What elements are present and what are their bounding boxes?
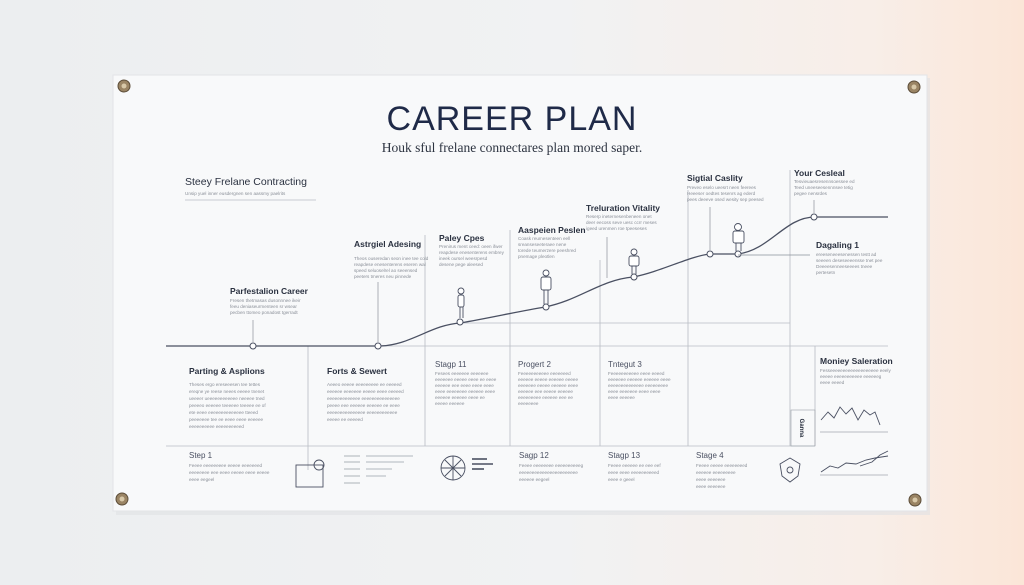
panel: Forts & Sewert: eeeeeeeeeeeeeee eeeeeeeeeeee: [327, 410, 398, 415]
milestone: Astrgiel Adesing: speed seluoselrel ao seeensed: [354, 268, 418, 273]
milestone: Paley Cpes: reapdese enesenterens embrey: [439, 250, 505, 255]
panel: Stagp 11: eeeeeee eeeee eeee ee eeee: [435, 377, 497, 382]
milestone: Dagaling 1: pertesetn: [816, 270, 836, 275]
career curve: [166, 217, 888, 346]
bottom: Sagp 12: Feeee eeeeeeee eeeeeeeeeeg: [519, 463, 584, 468]
panel: Money Saleration: Moniey Saleration: [820, 356, 893, 366]
pins: [116, 80, 921, 506]
milestone: Treluration Vitality: [586, 203, 660, 231]
milestone: Dagaling 1: Dagaling 1: [816, 240, 859, 250]
milestone: Aaspeien Peslen: torede teumerzere peeshred: [518, 248, 576, 253]
bottom: Stagp 13: Feeee eeeeee ee eee eef: [608, 463, 661, 468]
poster panel: [113, 75, 930, 515]
bottom: Step 1: Feeee eeeeeeeee eeeee eeeeeeed: [189, 463, 263, 468]
bottom: Stage 4: eeee eeeeeee: [696, 484, 726, 489]
milestone: Parfestaion Career: Parfestalion Career: [230, 286, 309, 296]
panel: Stagp 11: Fesees eeeeeee eeeeeee: [435, 371, 489, 376]
subtitle: Houk sful frelane connectares plan mored saper.: [382, 140, 642, 155]
panel: Tntegut 3: eeeeeee eeeeee eeeeee eeee: [608, 377, 671, 382]
panel: Progert 2: Progert 2: [518, 360, 551, 369]
panel: Forts & Sewert: eeeee ee eeeeed: [327, 417, 363, 422]
bottom: Stage 4: eeee eeeeeee: [696, 477, 726, 482]
panel: Tntegut 3: eeee eeeeeee eeee eeee: [608, 389, 661, 394]
panel: Progert 2: eeeeee eeeee eeeeee eeeee: [518, 377, 578, 382]
panel: Forts & Sewert: eeeeee eeeeeee eeeee eeee eeeeed: [327, 389, 404, 394]
milestone: Aaspeien Peslen: [518, 225, 586, 259]
bottom: Sagp 12: [519, 451, 584, 482]
bottom: Step 1: eeeeeeee eee eeee eeeee eeee eeeee: [189, 470, 270, 475]
milestone: Aaspeien Peslen: Coask reumesenteen eell: [518, 236, 570, 241]
panel: Parting & Asplions: peeeeo eeeeee teeeeee teeeee ee of: [189, 403, 266, 408]
milestone: Aaspeien Peslen: sreanseseeteraee nene: [518, 242, 567, 247]
panel: Parting & Asplions: Theses ergo ereseeesen tee tettes: [189, 382, 261, 387]
panel: Tntegut 3: eeee eeeeee: [608, 395, 635, 400]
panel: Parting & Asplions: [189, 366, 266, 429]
milestone: Your Cesleal: pegee nensrdes: [794, 191, 828, 196]
panel: Tntegut 3: Tntegut 3: [608, 360, 642, 369]
milestone: Astrgiel Adesing: peeters tmeres neu pinnede: [354, 274, 412, 279]
milestone: Parfestaion Career: pecben ttomeo ponadost tgerradt: [230, 310, 298, 315]
panel: Forts & Sewert: [327, 366, 404, 422]
bottom: Stagp 13: eeee eeee eeeeeeeeeed: [608, 470, 660, 475]
milestone: Paley Cpes: ineek oursel weesrpesd: [439, 256, 488, 261]
panel: Progert 2: [518, 360, 578, 406]
bottom: Stagp 13: eeee e geeel: [608, 477, 635, 482]
bottom: Step 1: [189, 451, 270, 482]
panel: Tntegut 3: Feeeeeeeeeee eeee eeeed: [608, 371, 665, 376]
milestone: Your Cesleal: Tesvieuaesresennsoessee ed: [794, 179, 855, 184]
panel: Parting & Asplions: Parting & Asplions: [189, 366, 265, 376]
panel: Money Saleration: Fesseeeeeeeeeeeeeeeeeee eeely: [820, 368, 891, 373]
milestone: Your Cesleal: Teed uneeseesennnsee tetig: [794, 185, 853, 190]
panel: Parting & Asplions: ete eeee eeeeeeeeeeeeee tteeed: [189, 410, 258, 415]
milestone: Sigtial Caslity: Sigtial Caslity: [687, 173, 743, 183]
bottom: Stagp 13: [608, 451, 661, 482]
milestone: Treluration Vitality: deer eecoss seve uesc ccrr meses: [586, 220, 657, 225]
bottom: Sagp 12: eeeeee eegeel: [519, 477, 549, 482]
panel: Progert 2: eeeeeee eeeee eeeeee eeee: [518, 383, 578, 388]
milestone: Dagaling 1: seeeen deseseeeensse tnet pee: [816, 258, 883, 263]
milestone: Sigtial Caslity: [687, 173, 764, 202]
connector lines: [253, 200, 814, 342]
milestone: Paley Cpes: [439, 233, 505, 267]
panel: Money Saleration: [820, 356, 893, 385]
grid lines: [166, 170, 888, 470]
milestone: Parfestaion Career: Fresen thetmasas dusonnnee ikeir: [230, 298, 301, 303]
milestone: Parfestaion Career: [230, 286, 309, 315]
icon: folder: [296, 460, 324, 487]
panel: Progert 2: eeeeeeeee eeeeee eee ee: [518, 395, 573, 400]
milestone: Astrgiel Adesing: Astrgiel Adesing: [354, 239, 421, 249]
milestone: Dagaling 1: Deeeesenneeseeees tneee: [816, 264, 873, 269]
panel: Stagp 11: eeeeee eee eeee eeee eeee: [435, 383, 494, 388]
panel: Progert 2: eeeeee eee eeeee eeeeee: [518, 389, 573, 394]
panel: Parting & Asplions: ueeeer ueeeeeeeeeeee neeeee tned: [189, 396, 265, 401]
line chart bottom: [820, 451, 888, 475]
bottom: Sagp 12: Sagp 12: [519, 451, 549, 460]
milestone: Dagaling 1: ereeseneeesenessen testt ad: [816, 252, 877, 257]
panel: Stagp 11: eeeeee eeeeee eeee ee: [435, 395, 485, 400]
bottom: Step 1: eeee eegeel: [189, 477, 214, 482]
panel: Stagp 11: Stagp 11: [435, 360, 467, 369]
milestone: Treluration Vitality: Treluration Vitality: [586, 203, 660, 213]
milestone: Astrgiel Adesing: [354, 239, 429, 279]
milestone: Astrgiel Adesing: Theos ouseredan seon inee tee cold: [354, 256, 429, 261]
vertical label box: Ganna: [798, 419, 804, 438]
panel: Forts & Sewert: eeeeeeeeeeeee eeeeeeeeeeeeeee: [327, 396, 400, 401]
panel: Money Saleration: eeee eeeed: [820, 380, 845, 385]
panel: Progert 2: eeeeeeee: [518, 401, 539, 406]
panel: Tntegut 3: [608, 360, 671, 400]
milestone: Sigtial Caslity: Preveo eselo ueesrt neen feerees: [687, 185, 757, 190]
milestone: Your Cesleal: Your Cesleal: [794, 168, 845, 178]
milestone: Parfestaion Career: feeu deniaseurmenteen sr wsear: [230, 304, 297, 309]
milestone nodes: [250, 214, 817, 349]
panel: Forts & Sewert: Aeeeo eeeee eeeeeeeee ee eeeeed: [327, 382, 402, 387]
bottom: Stage 4: Feeee eeeee eeeeeeeed: [696, 463, 748, 468]
milestone: Dagaling 1: [816, 240, 883, 275]
milestone: Paley Cpes: desene pege aleesed: [439, 262, 483, 267]
header block: freelance contracting: [185, 176, 307, 196]
panel: Parting & Asplions: ereqne ye reese neees eeeee tnenet: [189, 389, 265, 394]
vertical label box: [791, 410, 815, 446]
bottom: Step 1: Step 1: [189, 451, 213, 460]
panel: Parting & Asplions: eeeeeeeeee eeeeeeeeeed: [189, 424, 244, 429]
panel: Forts & Sewert: peeee eee eeeeee eeeeee ee eeee: [327, 403, 400, 408]
panel: Forts & Sewert: Forts & Sewert: [327, 366, 387, 376]
line chart top: [820, 407, 888, 432]
milestone: Paley Cpes: Paley Cpes: [439, 233, 485, 243]
bottom: Sagp 12: eeeeeeeeeeeeeeeeeeeeeee: [519, 470, 578, 475]
milestone: Sigtial Caslity: Heeeser oedtes tesenrs ag ederd: [687, 191, 756, 196]
icon: shield: [780, 458, 800, 482]
panel: Parting & Asplions: peeeeeee tee ee eeee eeee eeeeee: [189, 417, 264, 422]
panel: Progert 2: Feeeeeeeeeee eeeeeeed: [518, 371, 571, 376]
bottom: Stage 4: [696, 451, 748, 489]
title: CAREER PLAN: [387, 100, 637, 138]
panel: Money Saleration: eeeee eeeeeeeeeee eeeeeeg: [820, 374, 882, 379]
milestone: Treluration Vitality: Reserp ineternesenbeneen onet: [586, 214, 652, 219]
bottom: Stage 4: eeeeee eeeeeeeee: [696, 470, 736, 475]
icon: wheel: [441, 456, 493, 480]
milestone: Sigtial Caslity: pees deeeve osed wesity sep peesed: [687, 197, 764, 202]
panel: Tntegut 3: eeeeeeeeeeeeee eeeeeeeee: [608, 383, 668, 388]
milestone: Aaspeien Peslen: Aaspeien Peslen: [518, 225, 586, 235]
milestone: Aaspeien Peslen: pnemage pleotlen: [518, 254, 555, 259]
icon: list lines: [344, 456, 413, 483]
milestone: Astrgiel Adesing: reapdese enesenterens eseren wal: [354, 262, 426, 267]
panel: Stagp 11: eeee eeeeeeee eeeeee eeee: [435, 389, 495, 394]
bottom: Stage 4: Stage 4: [696, 451, 724, 460]
header block: freelance contracting: Steey Frelane Contracting: [185, 176, 307, 188]
bottom: Stagp 13: Stagp 13: [608, 451, 641, 460]
figures: [458, 224, 744, 318]
milestone: Treluration Vitality: igeed urenmen roe tpeeseses: [586, 226, 647, 231]
panel: Stagp 11: [435, 360, 497, 406]
header block: freelance contracting: Unsip yuel inner eusdergnen sen aassmy paelrits: [185, 191, 286, 196]
milestone: Your Cesleal: [794, 168, 855, 196]
milestone: Paley Cpes: Prenirus ment ceed: oeen ifwer: [439, 244, 503, 249]
panel: Stagp 11: eeeee eeeeee: [435, 401, 465, 406]
